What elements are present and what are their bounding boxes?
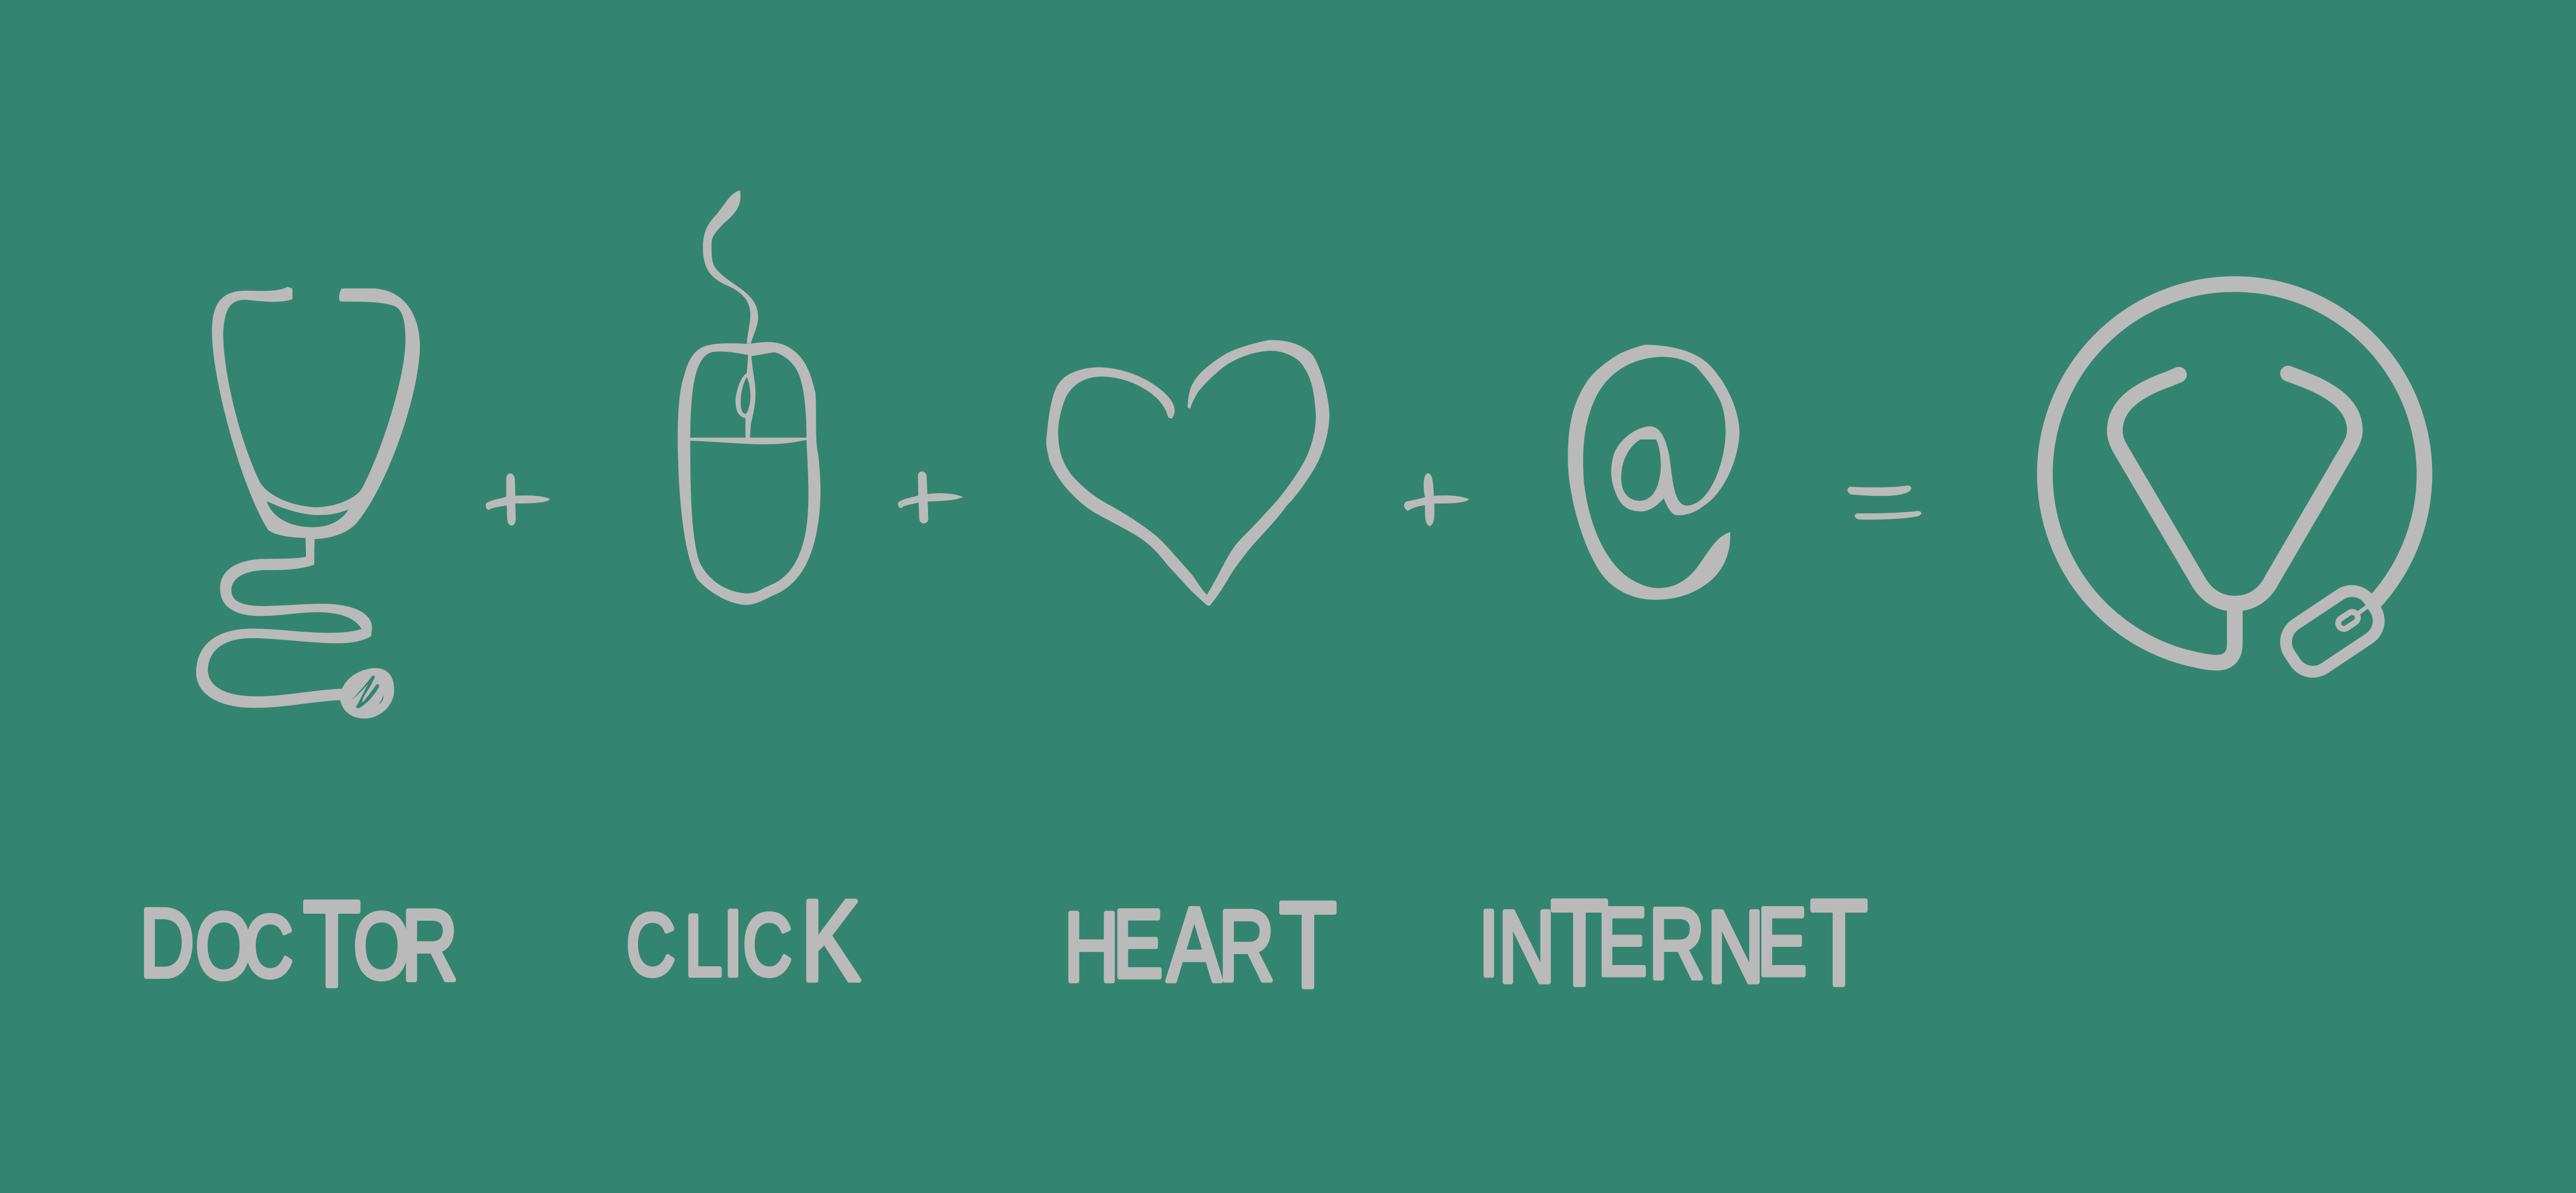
icon: hand-drawn heart — [1046, 340, 1329, 606]
label: CLICK: C — [626, 896, 675, 994]
label: DOCTOR: D — [140, 888, 194, 997]
icon: first plus sign — [486, 473, 550, 525]
label: CLICK: K — [801, 876, 860, 1005]
label: CLICK: C — [743, 896, 792, 994]
label: INTERNET: E — [1757, 889, 1807, 996]
label: HEART: A — [1167, 886, 1221, 1003]
label: DOCTOR: C — [244, 898, 293, 996]
logo: stethoscope and mouse in a circle — [2045, 284, 2424, 680]
logo: mouse wheel — [2336, 610, 2360, 631]
icon: equals sign — [1847, 485, 1922, 520]
label: CLICK: I — [723, 891, 743, 996]
label: DOCTOR: O — [353, 894, 410, 998]
logo: circular tube — [2045, 284, 2424, 663]
logo: mouse cord — [2358, 602, 2373, 613]
label: INTERNET: N — [1498, 889, 1555, 1004]
label: HEART: E — [1113, 890, 1163, 998]
label: INTERNET: E — [1597, 889, 1647, 996]
icon: hand-drawn at sign — [1568, 345, 1740, 600]
label: DOCTOR: R — [401, 889, 458, 1001]
label: HEART: H — [1064, 892, 1119, 1002]
label: HEART: R — [1218, 890, 1274, 1002]
logo: stethoscope head — [2115, 374, 2355, 603]
label: DOCTOR: O — [195, 894, 252, 998]
icon: second plus sign — [898, 471, 963, 524]
label: INTERNET: T — [1550, 875, 1608, 1011]
label: INTERNET: I — [1479, 891, 1499, 996]
icon: third plus sign — [1404, 473, 1469, 526]
icon: hand-drawn stethoscope — [196, 287, 420, 718]
label: HEART: T — [1279, 877, 1337, 1013]
label: CLICK: L — [685, 898, 722, 994]
label: INTERNET: N — [1707, 889, 1764, 1004]
label: DOCTOR: T — [303, 876, 361, 1012]
icon: hand-drawn computer mouse — [678, 190, 821, 605]
logo: mouse body — [2278, 583, 2387, 680]
label: INTERNET: R — [1648, 888, 1705, 999]
label: INTERNET: T — [1810, 875, 1868, 1011]
